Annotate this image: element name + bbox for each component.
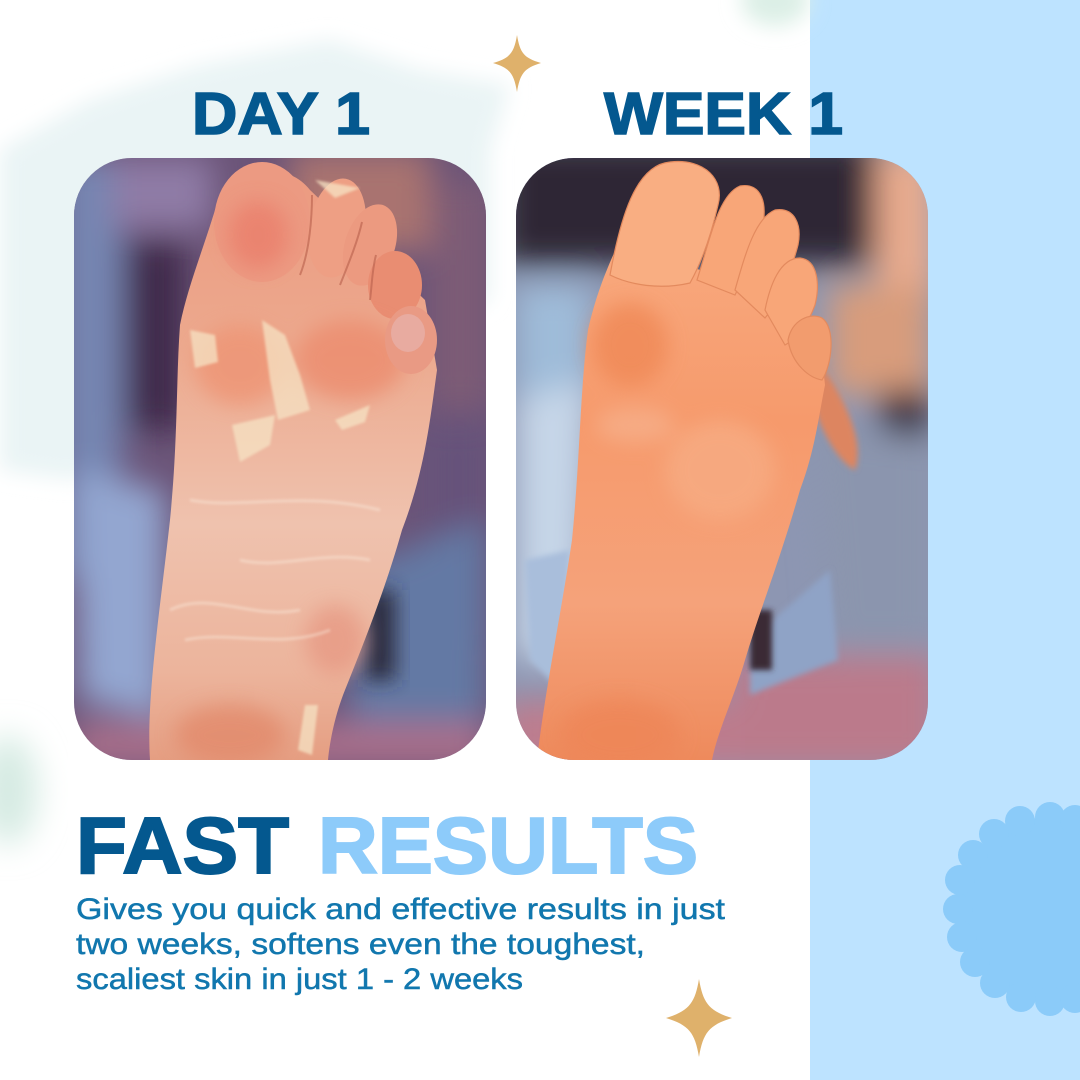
toes <box>214 162 422 319</box>
heading: week 1: WEEK 1 <box>604 81 843 147</box>
description text: Gives you quick and effective results in just <box>76 893 726 926</box>
toe gaps <box>300 195 376 300</box>
icon: bottom gold sparkle <box>666 979 732 1057</box>
toe and sole shading <box>175 201 405 765</box>
foot <box>149 170 437 760</box>
title: fast results <box>76 801 698 890</box>
scalloped blue badge <box>943 802 1080 1016</box>
description text <box>76 893 726 996</box>
toes <box>610 162 831 380</box>
foot <box>537 240 825 760</box>
heading: day 1: DAY 1 <box>192 81 370 147</box>
peeling skin <box>190 180 370 755</box>
photo: week 1 foot <box>516 158 928 760</box>
right blue panel <box>810 0 1080 1080</box>
description text: two weeks, softens even the toughest, <box>76 928 645 961</box>
foot shading <box>574 298 773 738</box>
icon: top gold sparkle <box>493 35 541 92</box>
soft corner glow <box>741 0 809 26</box>
title: fast results: RESULTS <box>318 801 698 890</box>
pale watercolor wash <box>0 40 510 845</box>
photo: day 1 foot <box>60 150 490 767</box>
description text: scaliest skin in just 1 - 2 weeks <box>76 963 523 996</box>
title: fast results: FAST <box>76 801 289 890</box>
little toe <box>385 306 437 374</box>
